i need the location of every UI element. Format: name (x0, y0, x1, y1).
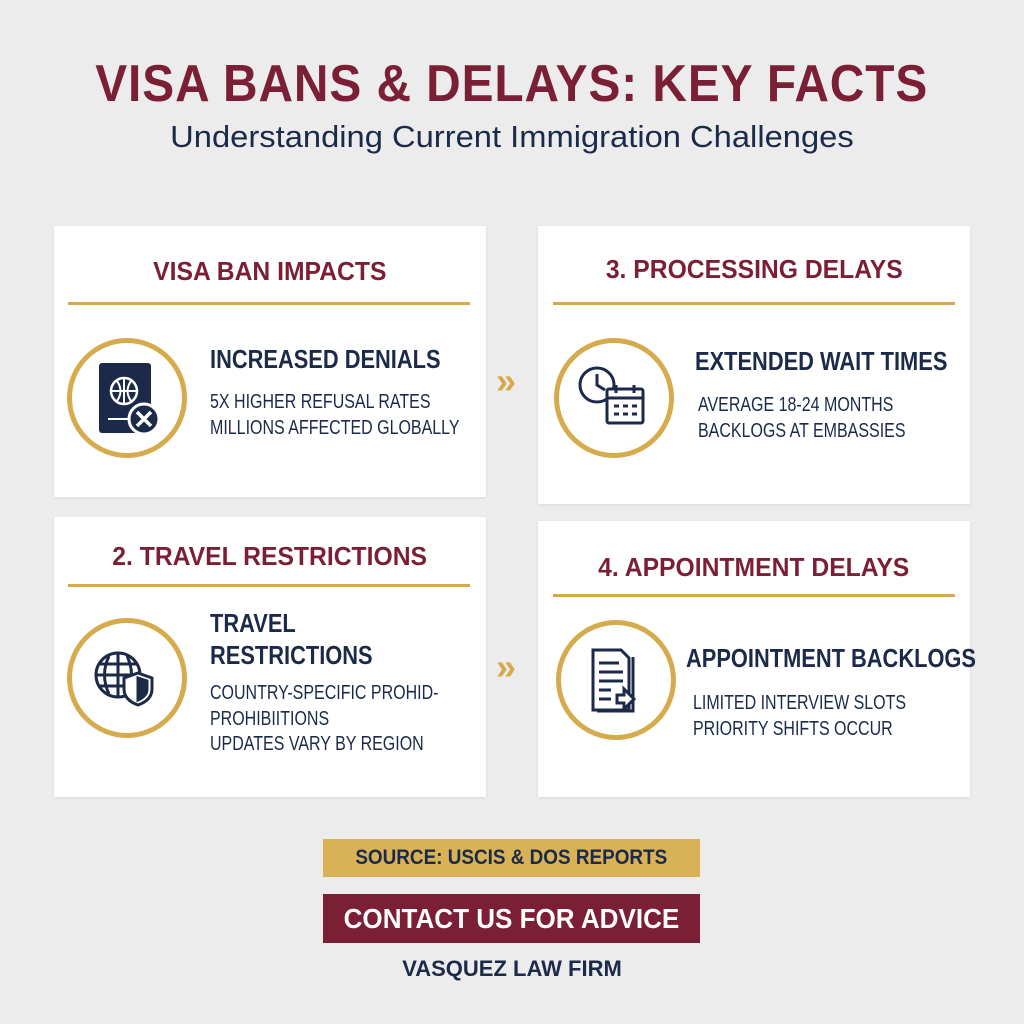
panel heading: 4. APPOINTMENT DELAYS (598, 552, 910, 582)
panel heading: VISA BAN IMPACTS (153, 256, 387, 286)
firm name: VASQUEZ LAW FIRM (402, 956, 622, 981)
text: travel restrictions (210, 608, 373, 670)
panel: appointment delays: LIMITED INTERVIEW SLOTS (693, 692, 906, 714)
panel: travel restrictions: PROHIBIITIONS (210, 708, 329, 730)
panel: travel restrictions: COUNTRY-SPECIFIC PROHID- (210, 682, 438, 704)
panel: visa ban impacts (54, 226, 486, 497)
icon: document (556, 620, 676, 740)
arrow: » (496, 646, 516, 687)
contact button: CONTACT US FOR ADVICE (344, 903, 679, 934)
source box: SOURCE: USCIS & DOS REPORTS (356, 846, 667, 869)
panel: processing delays (538, 226, 970, 504)
panel: visa ban impacts: 5X HIGHER REFUSAL RATES (210, 391, 430, 413)
panel heading: 2. TRAVEL RESTRICTIONS (113, 541, 427, 571)
panel: appointment delays: PRIORITY SHIFTS OCCUR (693, 718, 893, 740)
text: increased denials: INCREASED DENIALS (210, 344, 441, 374)
text: travel restrictions: RESTRICTIONS (210, 640, 373, 670)
panel: processing delays: BACKLOGS AT EMBASSIES (698, 420, 905, 442)
subtitle: Understanding Current Immigration Challenges (170, 119, 854, 154)
text: appointment backlogs: APPOINTMENT BACKLOGS (686, 643, 976, 673)
text: extended wait times: EXTENDED WAIT TIMES (695, 346, 947, 376)
icon: globe shield (67, 618, 187, 738)
panel: appointment delays (538, 521, 970, 797)
panel: visa ban impacts: MILLIONS AFFECTED GLOBALLY (210, 416, 460, 438)
arrow: » (496, 360, 516, 401)
panel: travel restrictions: UPDATES VARY BY REGION (210, 733, 424, 755)
source box (323, 839, 700, 877)
icon: clock calendar (554, 338, 674, 458)
title: VISA BANS & DELAYS: KEY FACTS (95, 55, 929, 113)
panel: processing delays: AVERAGE 18-24 MONTHS (698, 394, 893, 416)
icon: passport denied (67, 338, 187, 458)
text: travel restrictions: TRAVEL (210, 608, 296, 638)
contact button (323, 894, 700, 943)
panel: travel restrictions (54, 517, 486, 797)
panel heading: 3. PROCESSING DELAYS (606, 254, 902, 284)
